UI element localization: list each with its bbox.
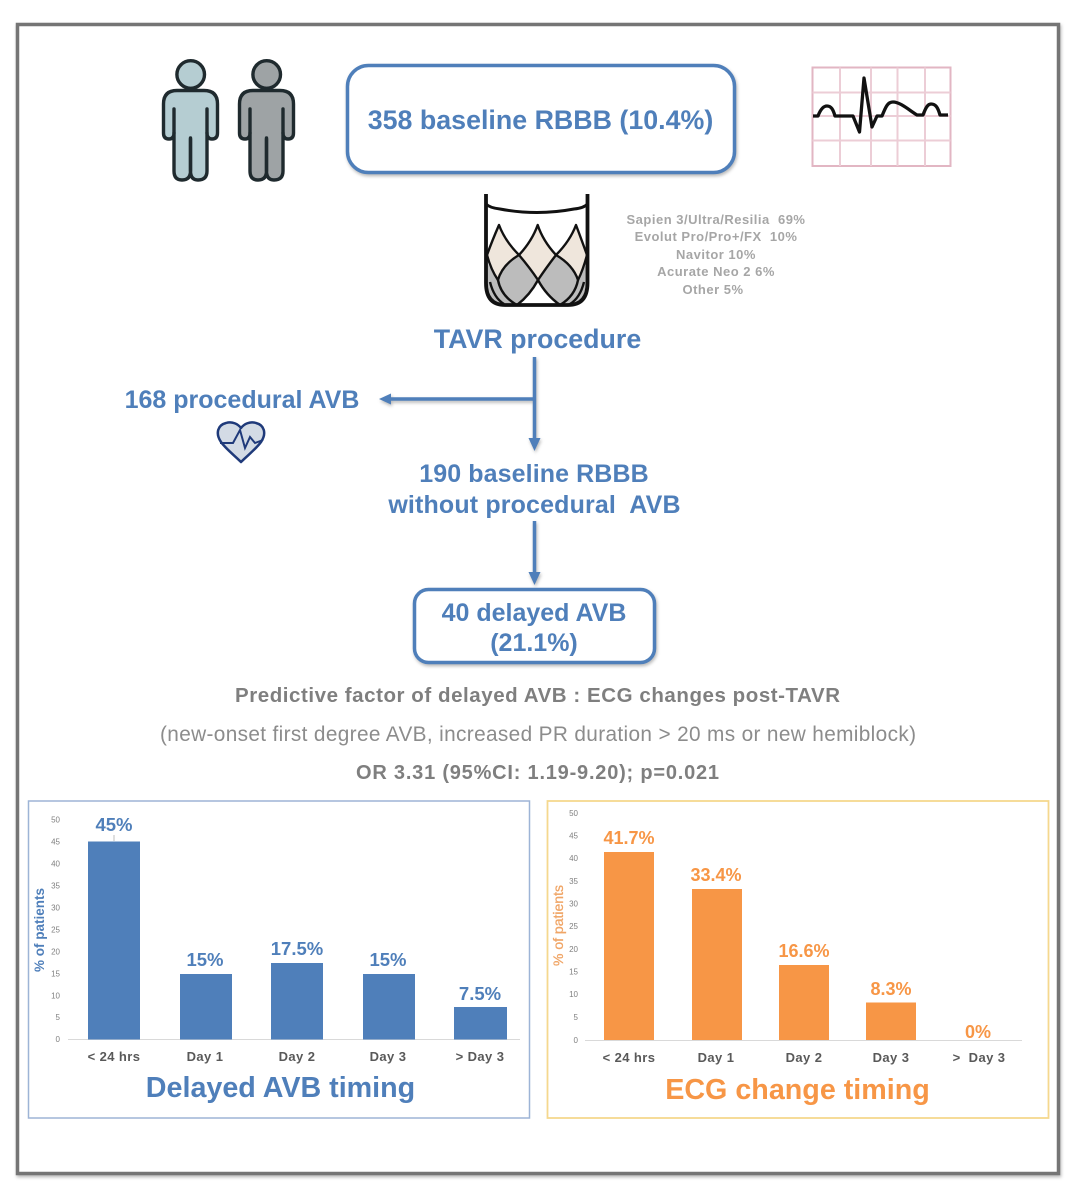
bar value labels: 15% xyxy=(369,949,407,970)
panel: delayed AVB timing xyxy=(28,801,530,1118)
y axis ticks: 45 xyxy=(569,832,579,840)
icon: light patient xyxy=(164,61,218,180)
heading: TAVR procedure: TAVR procedure xyxy=(434,324,641,354)
text: odds ratio: OR 3.31 (95%CI: 1.19-9.20); p=0.021 xyxy=(356,762,719,784)
icon: heart with pulse xyxy=(218,422,264,462)
icon: grey patient xyxy=(240,61,294,180)
bars xyxy=(604,852,916,1040)
icon: ECG strip xyxy=(812,68,950,166)
y axis ticks: 50 xyxy=(569,809,579,818)
text: baseline RBBB without AVB: 190 baseline RBBB xyxy=(419,460,649,488)
valve type list: Navitor 10% xyxy=(676,247,756,262)
category labels: > Day 3 xyxy=(456,1049,504,1064)
leader line xyxy=(113,835,115,841)
y axis ticks: 25 xyxy=(569,922,579,931)
category labels: < 24 hrs xyxy=(88,1049,140,1064)
y axis ticks: 0 xyxy=(56,1035,61,1044)
category labels: < 24 hrs xyxy=(603,1050,655,1065)
bar value labels: 41.7% xyxy=(603,828,655,848)
box: delayed AVB: 40 delayed AVB xyxy=(442,599,626,627)
bar value labels xyxy=(95,814,501,1004)
bar value labels: 33.4% xyxy=(690,865,742,885)
category labels: Day 3 xyxy=(873,1050,909,1065)
y axis title: % of patients xyxy=(32,888,47,972)
y axis ticks xyxy=(51,816,61,1044)
y axis ticks: 10 xyxy=(569,990,579,999)
bars xyxy=(88,842,507,1040)
y axis ticks: 45 xyxy=(51,838,61,846)
y axis ticks: 35 xyxy=(51,882,61,890)
bar value labels: 8.3% xyxy=(870,979,912,999)
text: baseline RBBB without AVB xyxy=(387,460,681,519)
y axis title: % of patients xyxy=(550,885,566,966)
bar value labels: 7.5% xyxy=(459,983,501,1004)
box: delayed AVB xyxy=(414,590,654,662)
icon: two patients xyxy=(164,61,294,180)
valve type list: Other 5% xyxy=(682,282,744,297)
y axis ticks: 40 xyxy=(569,854,579,863)
bar value labels: 0% xyxy=(965,1022,991,1042)
y axis ticks: 50 xyxy=(51,816,61,824)
category labels: Day 1 xyxy=(187,1049,223,1064)
y axis ticks: 5 xyxy=(574,1013,579,1022)
y axis ticks: 5 xyxy=(56,1013,61,1022)
category labels: Day 2 xyxy=(279,1049,315,1064)
text: baseline RBBB without AVB: without procedural AVB xyxy=(387,491,681,519)
box: baseline RBBB xyxy=(348,66,734,172)
box: delayed AVB: (21.1%) xyxy=(490,629,578,657)
y axis ticks: 10 xyxy=(51,992,61,1000)
arrow: down to delayed AVB xyxy=(528,521,540,585)
y axis ticks: 40 xyxy=(51,860,61,868)
y axis ticks: 25 xyxy=(51,926,61,934)
icon: TAVR valve xyxy=(486,194,588,305)
box: baseline RBBB: 358 baseline RBBB (10.4%) xyxy=(368,105,713,135)
y axis ticks: 15 xyxy=(51,970,61,978)
y axis ticks: 35 xyxy=(569,877,579,886)
valve type list xyxy=(627,212,805,297)
bar value labels: 15% xyxy=(186,949,224,970)
chart title: Delayed AVB timing xyxy=(146,1072,415,1104)
bar value labels xyxy=(603,828,991,1042)
category labels: Day 2 xyxy=(786,1050,822,1065)
category labels xyxy=(603,1050,1005,1065)
bar value labels: 16.6% xyxy=(778,941,830,961)
category labels: > Day 3 xyxy=(953,1050,1005,1065)
valve type list: Acurate Neo 2 6% xyxy=(657,264,775,279)
y axis ticks: 30 xyxy=(51,904,61,912)
valve type list: Sapien 3/Ultra/Resilia 69% xyxy=(627,212,805,227)
flow arrows from TAVR xyxy=(379,357,540,451)
label: procedural AVB: 168 procedural AVB xyxy=(125,386,359,414)
y axis ticks: 20 xyxy=(51,948,61,956)
y axis ticks xyxy=(569,809,579,1045)
y axis ticks: 20 xyxy=(569,945,579,954)
category labels: Day 3 xyxy=(370,1049,406,1064)
text: ECG change definition: (new-onset first degree AVB, increased PR duration > 20 ms or new hemiblock) xyxy=(160,723,916,746)
panel: ECG change timing xyxy=(548,801,1048,1118)
bar value labels: 45% xyxy=(95,814,133,835)
y axis ticks: 30 xyxy=(569,900,579,908)
valve type list: Evolut Pro/Pro+/FX 10% xyxy=(635,229,797,244)
y axis ticks: 15 xyxy=(569,968,579,976)
category labels xyxy=(88,1049,504,1064)
text: predictive factor: Predictive factor of delayed AVB : ECG changes post-TAVR xyxy=(235,684,840,707)
category labels: Day 1 xyxy=(698,1050,734,1065)
chart title: ECG change timing xyxy=(665,1074,930,1106)
bar value labels: 17.5% xyxy=(271,938,323,959)
y axis ticks: 0 xyxy=(574,1036,579,1045)
